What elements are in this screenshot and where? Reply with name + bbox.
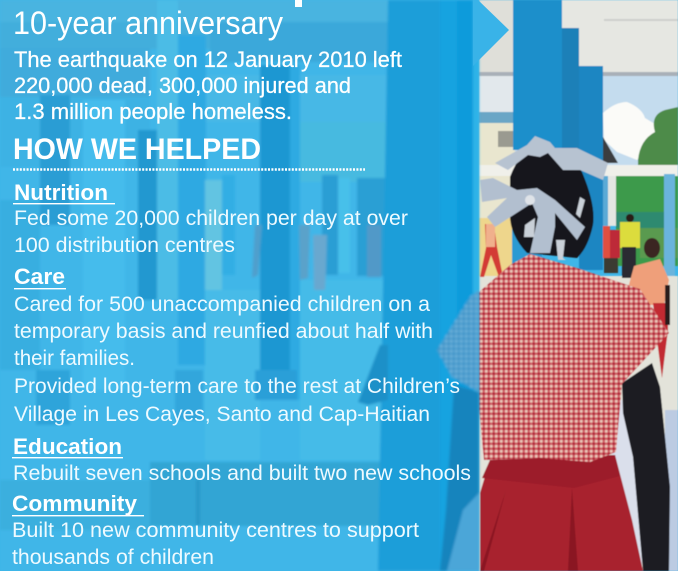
section: care: Cared for 500 unaccompanied children on a (14, 292, 430, 316)
top roof fin (473, 0, 509, 66)
intro text: 1.3 million people homeless. (14, 99, 292, 124)
overlay: floor (205, 290, 260, 460)
section: nutrition: 100 distribution centres (14, 233, 235, 257)
section: education: Rebuilt seven schools and built two new schools (13, 461, 471, 485)
section: care: Care (14, 264, 65, 289)
blue pillars (513, 0, 562, 150)
white beam (479, 165, 678, 176)
section: education: Education (13, 434, 122, 459)
sky (479, 76, 678, 166)
overlay: ceiling bands (0, 0, 388, 22)
overlay: right pillar (378, 0, 440, 571)
section: care: Provided long-term care to the rest at Children’s (14, 374, 460, 398)
section: nutrition: Fed some 20,000 children per day at over (14, 206, 408, 230)
section: nutrition: Nutrition (14, 180, 108, 205)
overlay: distant pillars (40, 95, 70, 225)
trees (638, 107, 678, 166)
intro text: 220,000 dead, 300,000 injured and (14, 73, 351, 98)
section: care: Village in Les Cayes, Santo and Cap-Haitian (14, 402, 430, 426)
overlay: girl's arm and sleeve (358, 345, 388, 405)
cloud (603, 102, 660, 160)
arm (622, 363, 670, 571)
section: care (14, 264, 460, 426)
section: community: thousands of children (12, 545, 214, 569)
head and hair (510, 143, 594, 258)
pale ground (479, 276, 678, 571)
building (479, 123, 515, 223)
ribbons (495, 136, 608, 180)
section: community (12, 491, 419, 569)
section: nutrition (13, 180, 408, 257)
skirt (480, 455, 643, 571)
child in orange shirt (627, 259, 669, 305)
section: community: Community (12, 491, 137, 516)
overlay: distant children (252, 225, 262, 278)
section: community: Built 10 new community centres to support (12, 518, 419, 542)
white tick cut off at top (295, 0, 302, 7)
blue overlay panel with faded photo (0, 0, 479, 571)
intro text (14, 47, 402, 124)
dark roof (603, 137, 618, 163)
background photo: right side schoolyard (479, 0, 678, 571)
overlay: main near pillar (260, 65, 290, 400)
section: care: temporary basis and reunfied about half with (14, 319, 433, 343)
heading: how we helped: HOW WE HELPED (13, 133, 261, 166)
distant people (480, 224, 503, 277)
section: care: their families. (14, 346, 135, 370)
intro text: The earthquake on 12 January 2010 left (14, 47, 402, 72)
ceiling (479, 0, 678, 74)
shirt (479, 254, 669, 462)
title: 10-year anniversary (13, 5, 284, 41)
section: education (12, 434, 471, 485)
